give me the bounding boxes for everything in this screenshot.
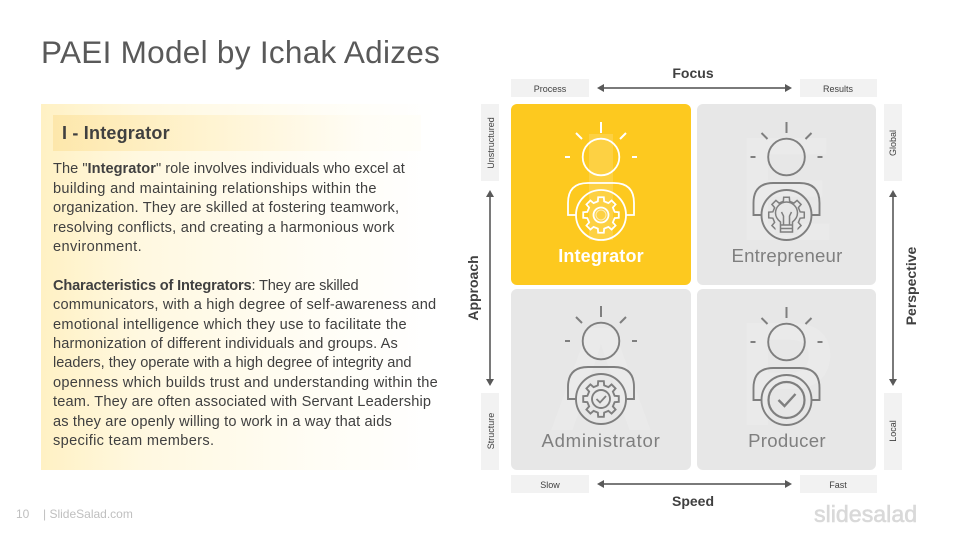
tag: Slow: Slow xyxy=(540,480,560,490)
tag: Local xyxy=(884,393,902,470)
tag: Global xyxy=(884,104,902,181)
label: Integrator: Integrator xyxy=(558,246,644,266)
text block: role description: harmonization of different individuals and groups. As xyxy=(53,336,398,352)
logo: slidesalad: slidesalad xyxy=(814,501,917,527)
tag: Process xyxy=(511,79,589,97)
panel: Administrator xyxy=(511,289,691,470)
axis label: Focus: Focus xyxy=(672,65,714,81)
label: Producer: Producer xyxy=(748,430,826,451)
axis label: Speed: Speed xyxy=(672,493,714,509)
label: Administrator: Administrator xyxy=(541,430,661,451)
arrow: Perspective axis xyxy=(889,190,897,386)
text block: role description: resolving conflicts, and creating a harmonious work xyxy=(53,220,395,236)
tag: Fast: Fast xyxy=(829,480,847,490)
text block: role description: environment. xyxy=(53,239,142,255)
panel: role description xyxy=(41,104,436,470)
tag: Global: Global xyxy=(888,130,898,156)
panel heading xyxy=(53,115,421,151)
title: PAEI Model by Ichak Adizes xyxy=(41,34,440,70)
tag: Slow xyxy=(511,475,589,493)
tag: Process: Process xyxy=(534,84,567,94)
text block: role description: as they are openly willing to work in a way that aids xyxy=(53,414,392,430)
tag: Local: Local xyxy=(888,420,898,442)
tag: Results: Results xyxy=(823,84,854,94)
watermark letter P: P xyxy=(737,292,835,457)
icon: administrator person with gear check xyxy=(565,306,637,424)
watermark letter A: A xyxy=(548,297,654,462)
text block: role description: The "Integrator" role involves individuals who excel at xyxy=(53,161,405,177)
arrow: Approach axis xyxy=(486,190,494,386)
text block: role description: building and maintaining relationships within the xyxy=(53,181,377,197)
watermark letter I xyxy=(589,134,613,240)
tag: Structure: Structure xyxy=(486,413,496,449)
text block: role description: team. They are often associated with Servant Leadership xyxy=(53,394,431,410)
panel: Entrepreneur xyxy=(697,104,876,285)
text block: role description: Characteristics of Integrators: They are skilled xyxy=(53,278,358,294)
text block: role description: communicators, with a high degree of self-awareness and xyxy=(53,297,436,313)
axis label: Perspective: Perspective xyxy=(903,246,919,325)
footer: page number: 10 xyxy=(16,507,29,521)
arrow: Speed axis xyxy=(597,480,792,488)
text block: role description: specific team members. xyxy=(53,433,214,449)
text block: role description xyxy=(53,161,438,449)
tag: Fast xyxy=(800,475,877,493)
text block: role description: organization. They are skilled at fostering teamwork, xyxy=(53,200,399,216)
tag: Structure xyxy=(481,393,499,470)
footer: site name: | SlideSalad.com xyxy=(43,507,133,521)
label: Entrepreneur: Entrepreneur xyxy=(732,245,842,266)
icon: producer person with check badge xyxy=(750,307,822,425)
text block: role description: openness which builds trust and understanding within the xyxy=(53,375,438,391)
icon: integrator person with gear xyxy=(565,122,637,240)
icon: entrepreneur person with bulb xyxy=(750,122,822,240)
text block: role description: emotional intelligence which they use to facilitate the xyxy=(53,317,407,333)
tag: Unstructured xyxy=(481,104,499,181)
watermark letter E: E xyxy=(737,107,835,272)
arrow: Focus axis xyxy=(597,84,792,92)
panel: Producer xyxy=(697,289,876,470)
tag: Results xyxy=(800,79,877,97)
tag: Unstructured: Unstructured xyxy=(486,117,496,169)
text block: role description: leaders, they operate with a high degree of integrity and xyxy=(53,355,412,371)
axis label: Approach: Approach xyxy=(465,255,481,321)
panel: Integrator xyxy=(511,104,691,285)
panel heading: I - Integrator xyxy=(62,123,170,143)
